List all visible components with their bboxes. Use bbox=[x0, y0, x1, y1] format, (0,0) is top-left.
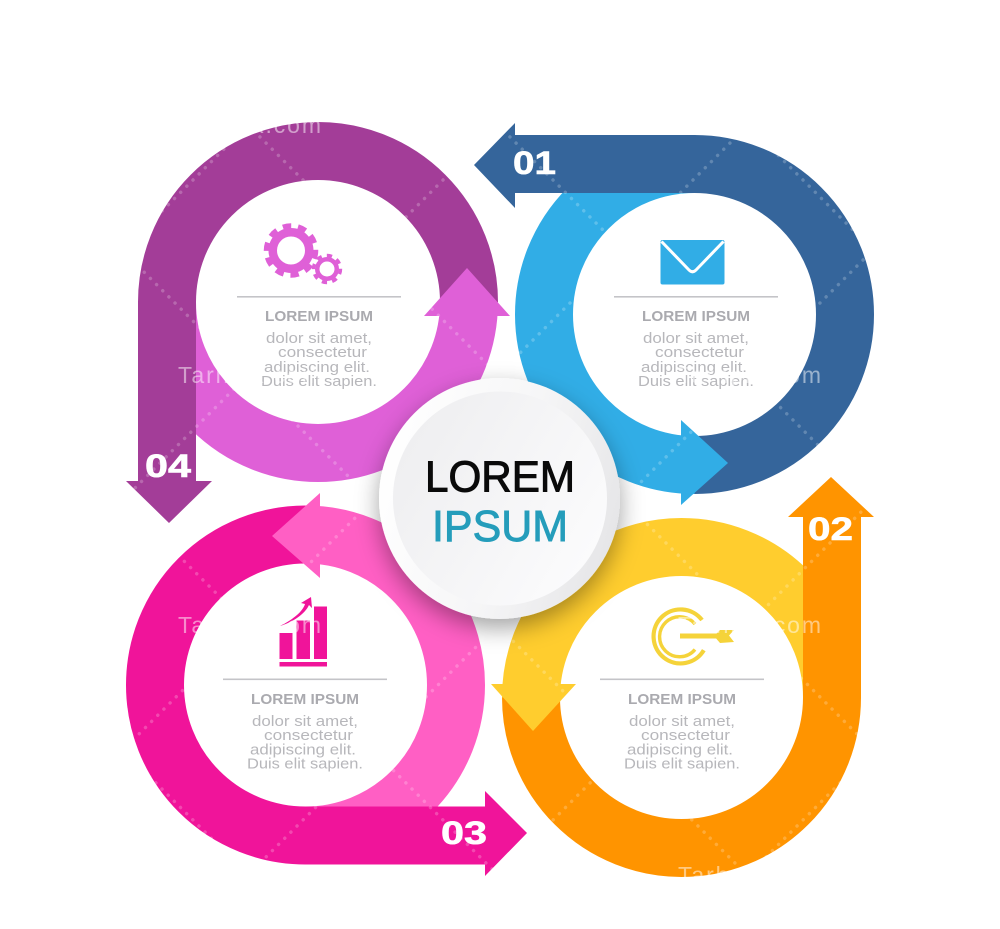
watermarks: Tarhpik.com bbox=[678, 612, 821, 638]
body copy: consectetur bbox=[655, 344, 744, 361]
dark purple straight arrow bbox=[126, 301, 212, 523]
body copy bbox=[247, 713, 363, 772]
watermarks: Tarhpik.com bbox=[678, 362, 821, 388]
title: LOREM: LOREM bbox=[425, 452, 575, 502]
body copy bbox=[638, 330, 754, 390]
light blue ring bbox=[544, 164, 694, 465]
number 03: 03 bbox=[441, 815, 487, 851]
panel: step 02 orange loop bbox=[491, 477, 874, 848]
body copy: Duis elit sapien. bbox=[624, 756, 740, 772]
body copy: Duis elit sapien. bbox=[247, 756, 363, 772]
body copy: adipiscing elit. bbox=[250, 742, 356, 758]
light purple ring bbox=[167, 302, 469, 453]
watermarks: Tarhpik.com bbox=[178, 112, 321, 138]
heading: LOREM IPSUM bbox=[265, 308, 373, 325]
icon: envelope bbox=[660, 240, 724, 284]
title: IPSUM: IPSUM bbox=[432, 502, 568, 551]
body copy: dolor sit amet, bbox=[629, 713, 735, 730]
divider bbox=[223, 678, 387, 680]
dark blue straight arrow bbox=[474, 123, 696, 208]
icon: target with dart bbox=[654, 609, 734, 663]
watermarks: Tarhpik.com bbox=[678, 112, 821, 138]
light pink arrowhead bbox=[272, 493, 320, 578]
number 04: 04 bbox=[145, 448, 191, 484]
body copy: adipiscing elit. bbox=[264, 359, 370, 376]
dark pink straight arrow bbox=[304, 791, 527, 876]
light blue arrowhead bbox=[681, 420, 728, 505]
heading: LOREM IPSUM bbox=[628, 691, 736, 708]
body copy: adipiscing elit. bbox=[641, 359, 747, 376]
body copy: Duis elit sapien. bbox=[638, 373, 754, 390]
body copy: consectetur bbox=[264, 727, 353, 744]
divider bbox=[600, 678, 764, 680]
body copy: dolor sit amet, bbox=[643, 330, 749, 347]
heading: LOREM IPSUM bbox=[642, 308, 750, 325]
badge inner disc bbox=[393, 392, 607, 606]
icon: gears bbox=[266, 226, 340, 282]
heading: LOREM IPSUM bbox=[251, 691, 359, 708]
number 02: 02 bbox=[808, 511, 853, 547]
center badge bbox=[379, 378, 620, 619]
light purple arrowhead bbox=[424, 268, 510, 316]
body copy: adipiscing elit. bbox=[627, 742, 733, 758]
yellow ring bbox=[531, 547, 832, 698]
text block: step 04 bbox=[237, 226, 401, 390]
divider bbox=[614, 296, 778, 298]
panel: step 04 purple loop bbox=[126, 151, 510, 523]
watermarks: Tarhpik.com bbox=[678, 862, 821, 888]
panel: step 01 blue loop bbox=[474, 123, 845, 505]
dark pink arc bbox=[155, 534, 306, 836]
watermarks: Tarhpik.com bbox=[178, 862, 321, 888]
number 01: 01 bbox=[513, 145, 556, 181]
dark purple arc bbox=[167, 151, 469, 302]
watermarks: Tarhpik.com bbox=[178, 362, 321, 388]
body copy: consectetur bbox=[641, 727, 730, 744]
body copy bbox=[261, 330, 377, 390]
light pink ring bbox=[306, 534, 456, 836]
text block: step 01 bbox=[614, 240, 778, 390]
panel: step 03 pink loop bbox=[155, 493, 527, 876]
body copy: Duis elit sapien. bbox=[261, 373, 377, 390]
yellow arrowhead bbox=[491, 684, 576, 731]
watermarks: Tarhpik.com bbox=[178, 612, 321, 638]
orange straight arrow bbox=[788, 477, 874, 698]
badge outer disc bbox=[379, 378, 620, 619]
orange arc bbox=[531, 698, 832, 848]
body copy: dolor sit amet, bbox=[266, 330, 372, 347]
text block: step 02 bbox=[600, 609, 764, 772]
watermarks bbox=[178, 112, 821, 888]
dark blue arc bbox=[694, 164, 845, 465]
body copy: dolor sit amet, bbox=[252, 713, 358, 730]
icon: rising bar chart bbox=[280, 597, 327, 666]
text block: step 03 bbox=[223, 597, 387, 772]
body copy bbox=[624, 713, 740, 772]
divider bbox=[237, 296, 401, 298]
body copy: consectetur bbox=[278, 344, 367, 361]
